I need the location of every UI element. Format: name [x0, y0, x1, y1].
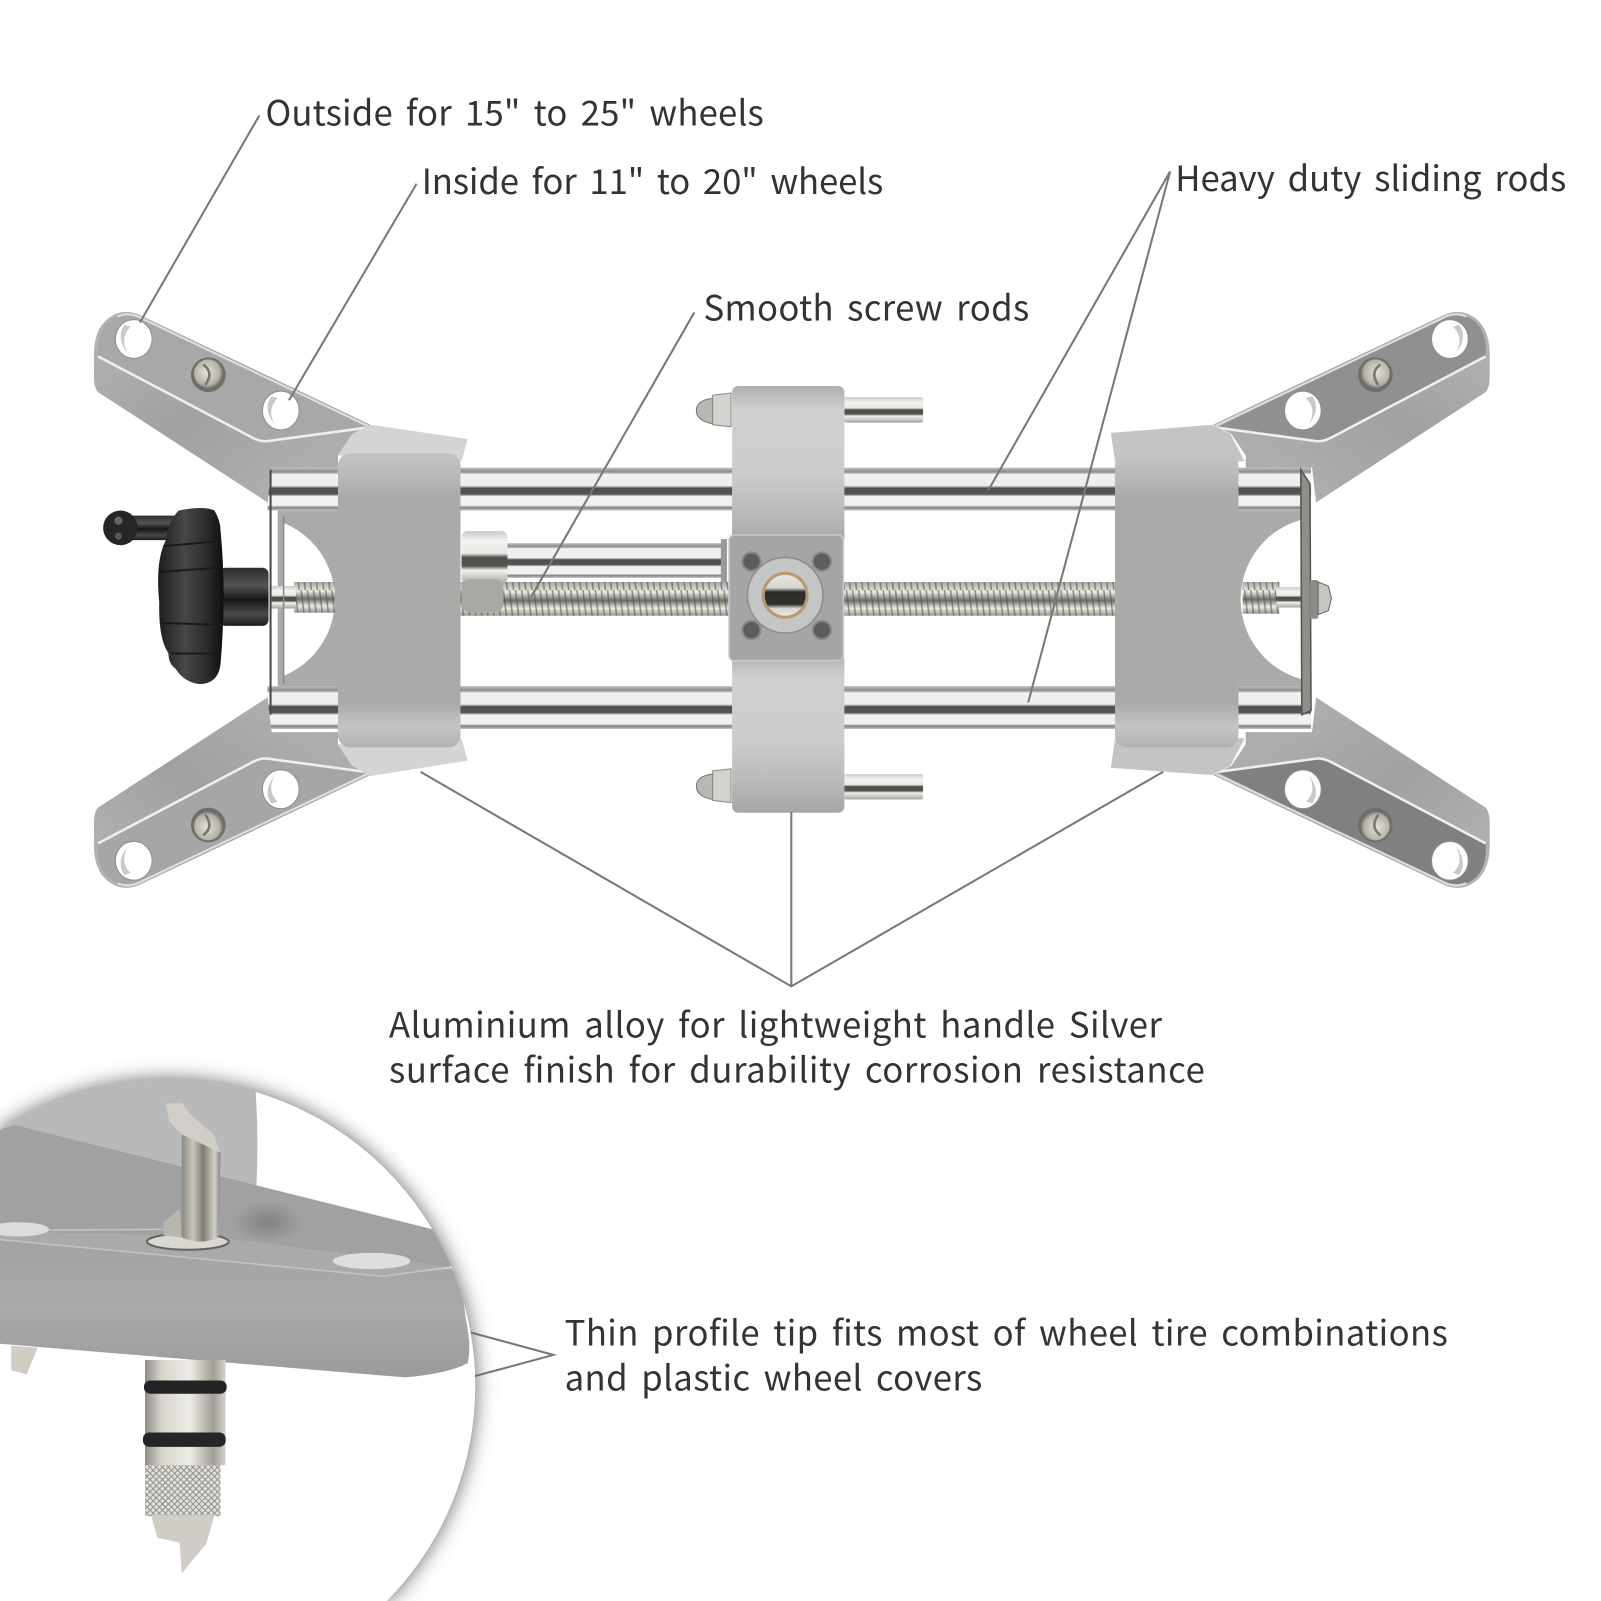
- top-right arm: [1213, 312, 1490, 502]
- center bottom block: [732, 653, 844, 813]
- text block: aluminium alloy: surface finish for durability corrosion resistance: [389, 1042, 1205, 1092]
- text block: thin profile tip: Thin profile tip fits most of wheel tire combinations: [565, 1306, 1448, 1356]
- left block: [338, 425, 468, 776]
- left and right support wedges: [169, 506, 1406, 692]
- arm top shadow spot: [242, 1207, 294, 1238]
- inset circle shadow: [0, 1079, 475, 1601]
- center top block: [732, 386, 844, 544]
- leader: screw rods: [531, 312, 694, 597]
- leader: outside holes: [140, 115, 259, 323]
- arm top surface: [0, 1125, 453, 1276]
- bottom-left arm: [94, 697, 371, 888]
- heading: outside wheels label: Outside for 15" to 25" wheels: [265, 86, 764, 136]
- leader: tip: [471, 1332, 553, 1376]
- center pins and nuts: [696, 393, 923, 803]
- bottom-right arm: [1213, 697, 1490, 888]
- rear plate: [0, 1072, 257, 1190]
- arm front face: [0, 1240, 469, 1377]
- knurled collar: [145, 1465, 221, 1516]
- top-left arm: [94, 312, 371, 502]
- inset circle: tip close-up: [0, 1072, 475, 1601]
- small rear tip: [11, 1346, 38, 1374]
- lower cylinder: [143, 1360, 227, 1465]
- text block: aluminium alloy: Aluminium alloy for lightweight handle Silver: [389, 997, 1162, 1047]
- pointed tip: [151, 1515, 214, 1573]
- leader lines: [140, 115, 1170, 1376]
- leader: sliding rods: [988, 172, 1170, 702]
- leader: inside holes: [289, 184, 417, 400]
- right block: [1111, 425, 1245, 775]
- text block: thin profile tip: [565, 1306, 1448, 1401]
- leader: aluminium blocks: [421, 772, 1163, 986]
- wheel clamp product illustration: [94, 312, 1490, 888]
- arm top strip: [0, 1231, 451, 1276]
- end plate right: [1301, 470, 1311, 715]
- end plate left: [270, 470, 284, 715]
- adjustment knob: [103, 508, 269, 684]
- heading: sliding rods label: Heavy duty sliding rods: [1175, 151, 1566, 201]
- arm holes: [0, 1222, 410, 1269]
- text block: aluminium alloy: [389, 997, 1205, 1092]
- arm highlight lines: [0, 1229, 449, 1276]
- heading: screw rods label: Smooth screw rods: [704, 281, 1029, 331]
- threaded screw rod: [270, 582, 1307, 616]
- heading: inside wheels label: Inside for 11" to 20" wheels: [422, 154, 883, 204]
- smooth auxiliary rod with head: [462, 531, 727, 613]
- sliding rods: [268, 468, 1311, 729]
- text block: thin profile tip: and plastic wheel covers: [565, 1351, 982, 1401]
- center plate with bore: [729, 535, 843, 661]
- upper pin: [147, 1103, 229, 1250]
- end nut right: [1310, 580, 1331, 619]
